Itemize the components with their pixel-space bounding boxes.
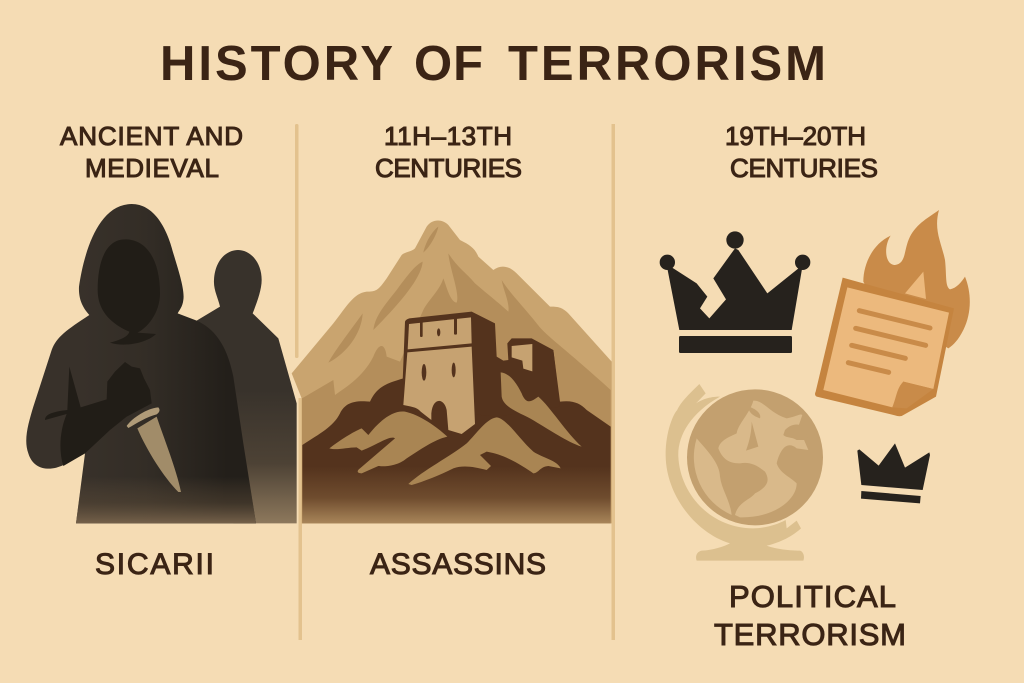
main tower battlement panel	[408, 317, 472, 349]
mountain shade layer	[302, 253, 611, 523]
heading: 11th-13th centuries: 11H–13TH	[384, 121, 512, 151]
label: political terrorism: POLITICAL	[729, 579, 896, 614]
arm and hand	[45, 362, 152, 466]
flame	[863, 210, 970, 348]
heading: 19th-20th centuries: 19TH–20TH	[725, 121, 866, 151]
paper text lines	[848, 311, 930, 372]
title: HISTORY	[160, 37, 393, 91]
mountain streaks	[328, 227, 438, 363]
globe land darker details	[746, 407, 808, 451]
globe land	[694, 401, 808, 517]
globe stand	[666, 384, 804, 561]
label: political terrorism	[714, 579, 906, 652]
hooded figure silhouette	[26, 204, 256, 523]
label: assassins: ASSASSINS	[370, 548, 546, 581]
title	[160, 37, 826, 91]
divider: left	[295, 124, 302, 640]
ruined tower window	[512, 344, 532, 371]
paper sheet	[823, 287, 949, 407]
dagger blade	[137, 417, 181, 492]
title: TERRORISM	[508, 37, 826, 91]
tower windows	[420, 317, 457, 381]
heading: 11th-13th centuries	[375, 121, 522, 183]
foreground hill: center	[408, 417, 561, 485]
paper fold	[892, 382, 933, 408]
label: political terrorism: TERRORISM	[714, 617, 906, 652]
heading: ancient and medieval: ANCIENT AND	[60, 121, 243, 151]
heading: 19th-20th centuries: CENTURIES	[730, 153, 878, 183]
illustration: assassins mountain fortress	[292, 221, 612, 523]
heading: ancient and medieval: MEDIEVAL	[85, 153, 219, 183]
globe sphere	[687, 389, 823, 525]
robe bottom fade	[76, 484, 256, 524]
face shadow	[98, 239, 160, 345]
label: sicarii: SICARII	[95, 548, 214, 581]
flame inner cutout	[905, 272, 926, 299]
paper edge	[815, 278, 954, 416]
icon: globe on stand	[666, 384, 823, 561]
divider: right	[612, 124, 615, 640]
icon: small crown	[857, 443, 930, 503]
illustration: sicarii hooded figures	[26, 204, 297, 524]
icon: large broken crown	[660, 231, 810, 353]
title: OF	[414, 37, 483, 91]
rocky ground	[302, 350, 611, 523]
dagger guard	[127, 407, 160, 428]
background figure silhouette	[197, 250, 297, 523]
icon: burning document	[815, 210, 970, 416]
main tower dark body	[402, 312, 560, 417]
main tower light face	[403, 347, 475, 434]
heading: 19th-20th centuries	[725, 121, 878, 183]
heading: ancient and medieval	[60, 121, 243, 183]
foreground hill: right	[501, 372, 582, 447]
mountain back layer	[292, 221, 612, 523]
heading: 11th-13th centuries: CENTURIES	[375, 153, 522, 183]
foreground hill: left upper	[329, 411, 447, 473]
